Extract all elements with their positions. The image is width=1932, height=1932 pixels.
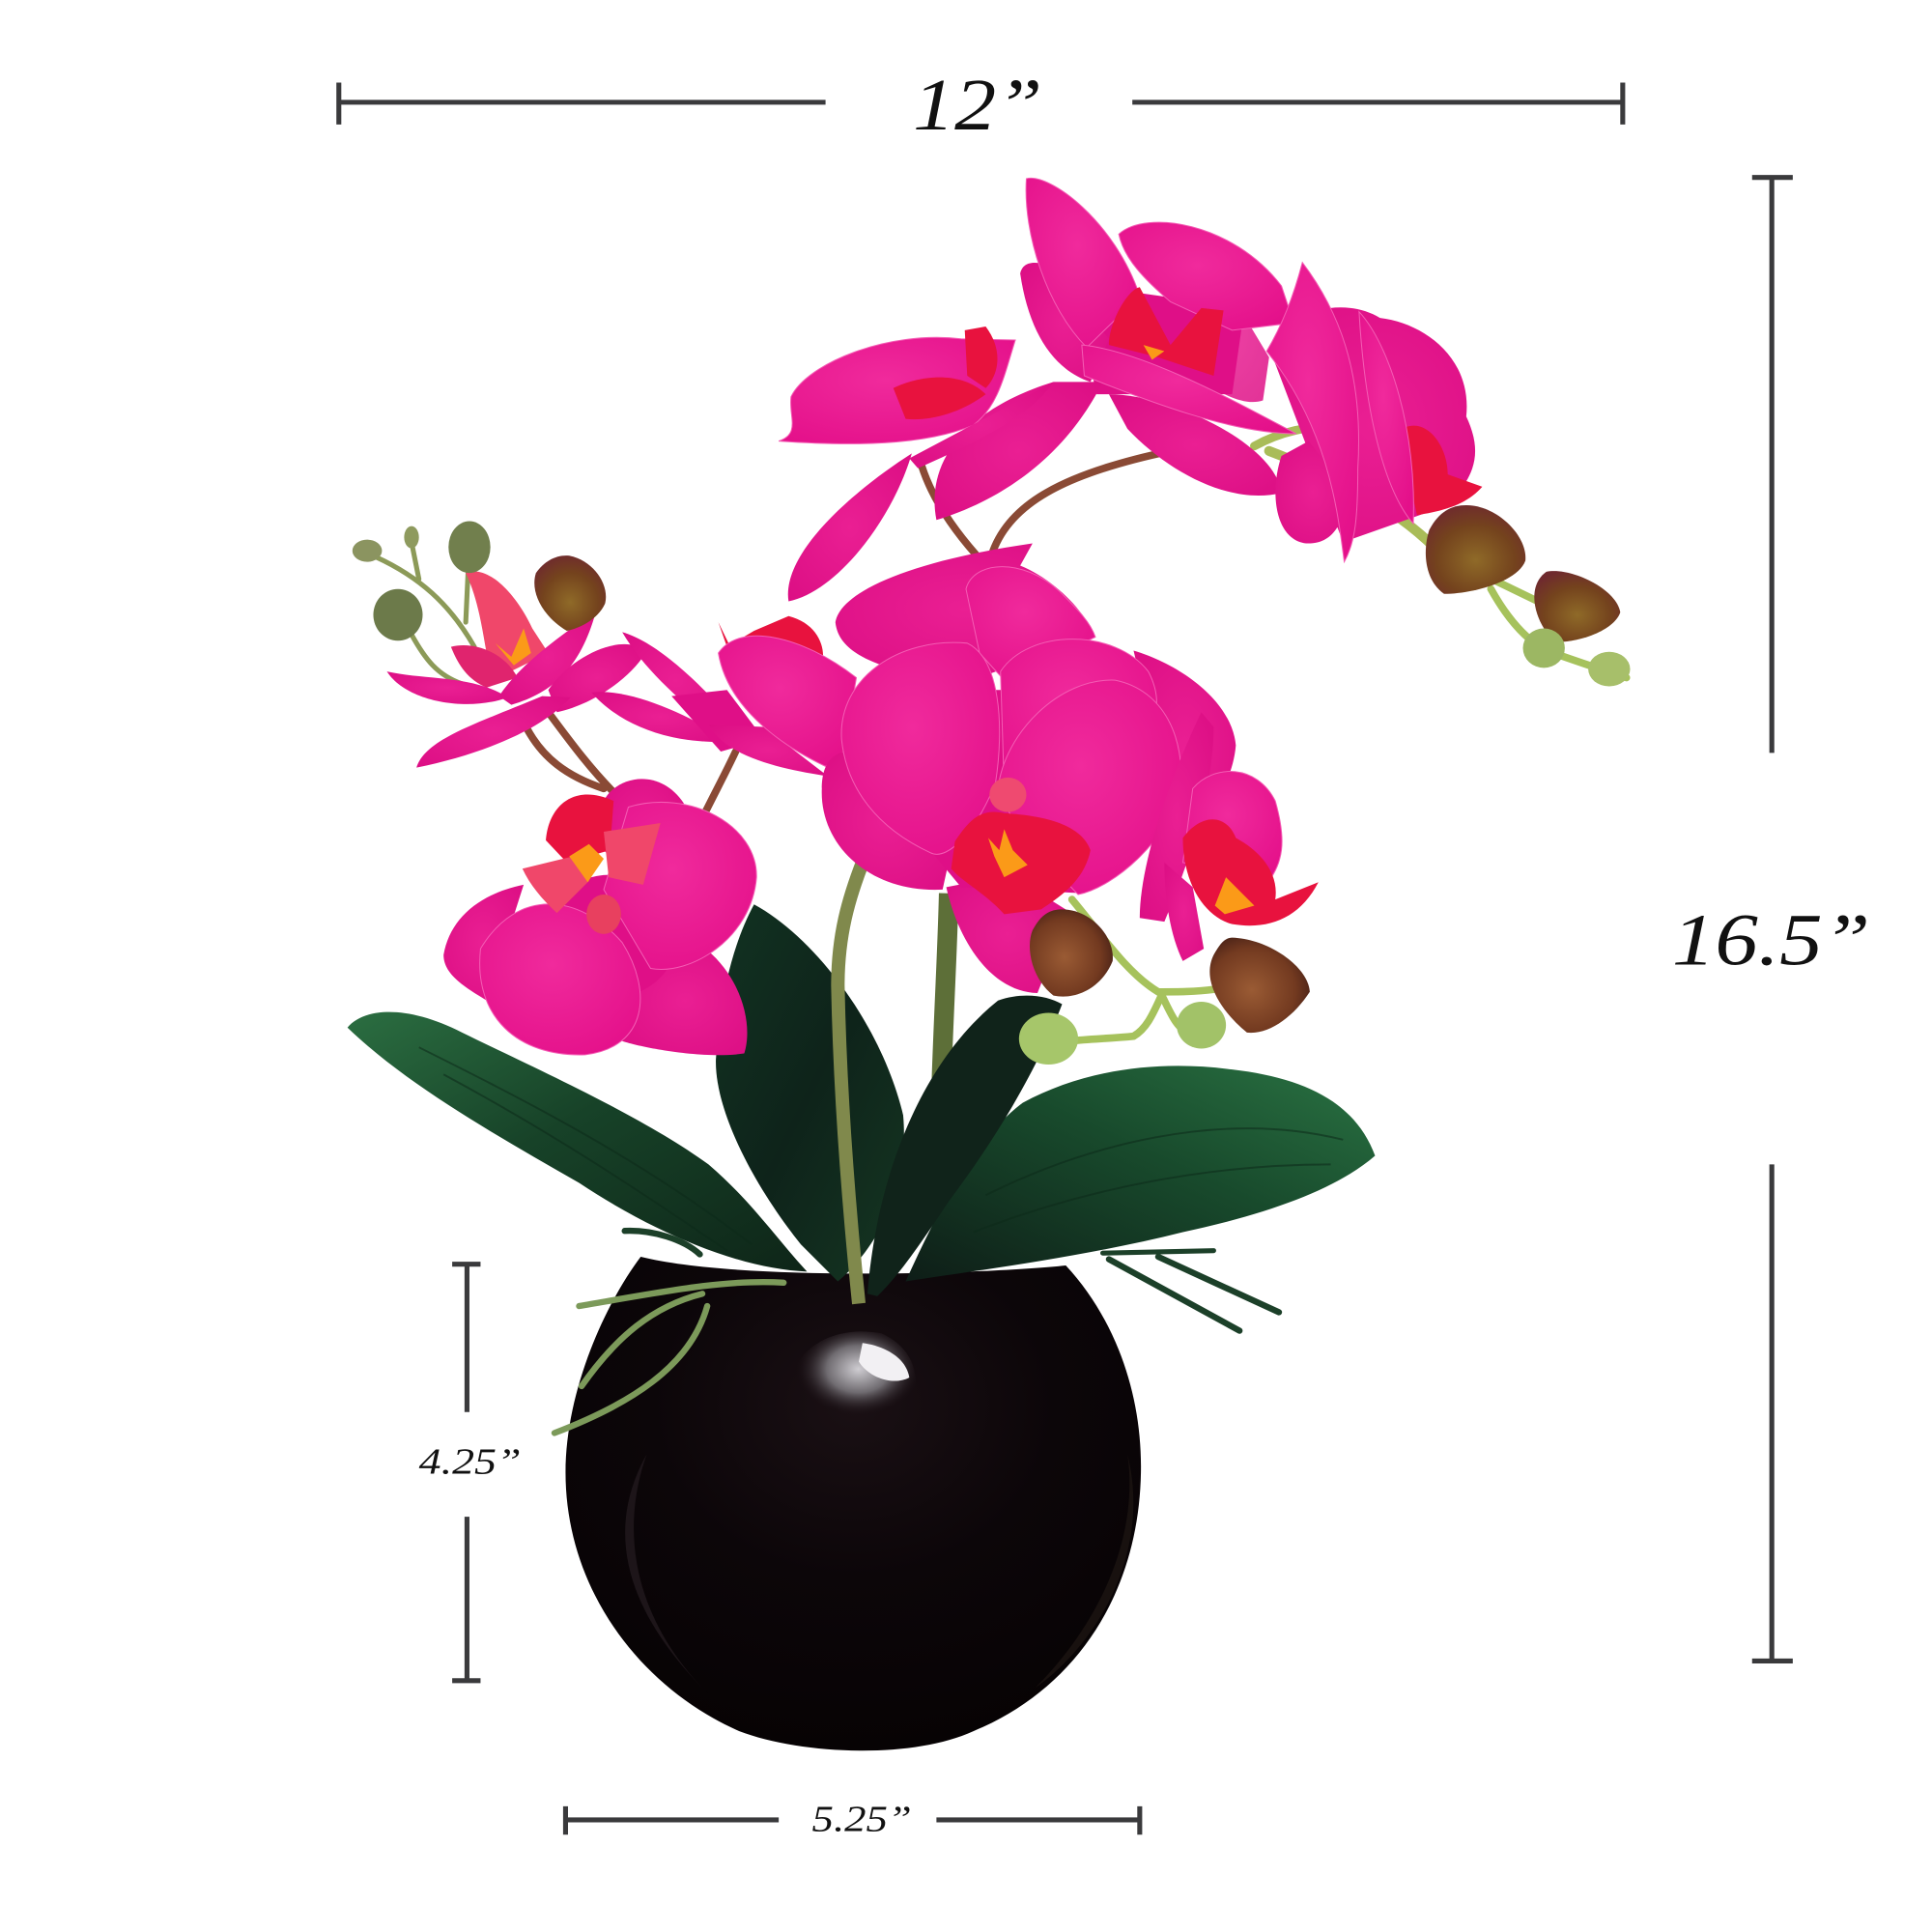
pot <box>565 1257 1141 1750</box>
aerial roots <box>554 1282 783 1433</box>
dimension: pot width 5.25 inches: 5.25” <box>812 1799 912 1839</box>
seed pods and buds: top right <box>1426 505 1631 686</box>
left branches <box>376 542 735 813</box>
seed pods and buds: upper left <box>353 522 606 640</box>
flower: top centre <box>934 178 1296 520</box>
dimension: pot height 4.25 inches <box>419 1263 522 1682</box>
dimension: pot height 4.25 inches: 4.25” <box>419 1442 522 1483</box>
dimension: overall width 12 inches <box>337 64 1624 146</box>
flower: large centre <box>822 543 1236 993</box>
dimension: overall height 16.5 inches <box>1672 176 1870 1662</box>
flower: top left <box>779 327 1054 601</box>
leaf: right <box>906 1065 1375 1282</box>
dimension: overall width 12 inches: 12” <box>913 64 1042 146</box>
dimension: overall height 16.5 inches: 16.5” <box>1672 899 1870 981</box>
flower: right side of centre <box>1140 712 1319 961</box>
leaf: front centre <box>867 996 1062 1296</box>
flower: top right <box>1266 263 1482 562</box>
flower: small middle <box>591 616 856 777</box>
plant illustration <box>348 178 1631 1750</box>
lower right branch <box>1069 899 1213 1041</box>
leaf: back centre <box>716 904 904 1282</box>
stems <box>838 856 949 1303</box>
flower: lower left <box>443 779 756 1055</box>
dimension: pot width 5.25 inches <box>565 1799 1140 1839</box>
seed pods and buds: lower right <box>1019 909 1310 1065</box>
upper branches <box>922 425 1627 678</box>
small grass blades <box>625 1231 1279 1331</box>
flower: small left <box>387 571 645 768</box>
leaf: left <box>348 1012 807 1271</box>
